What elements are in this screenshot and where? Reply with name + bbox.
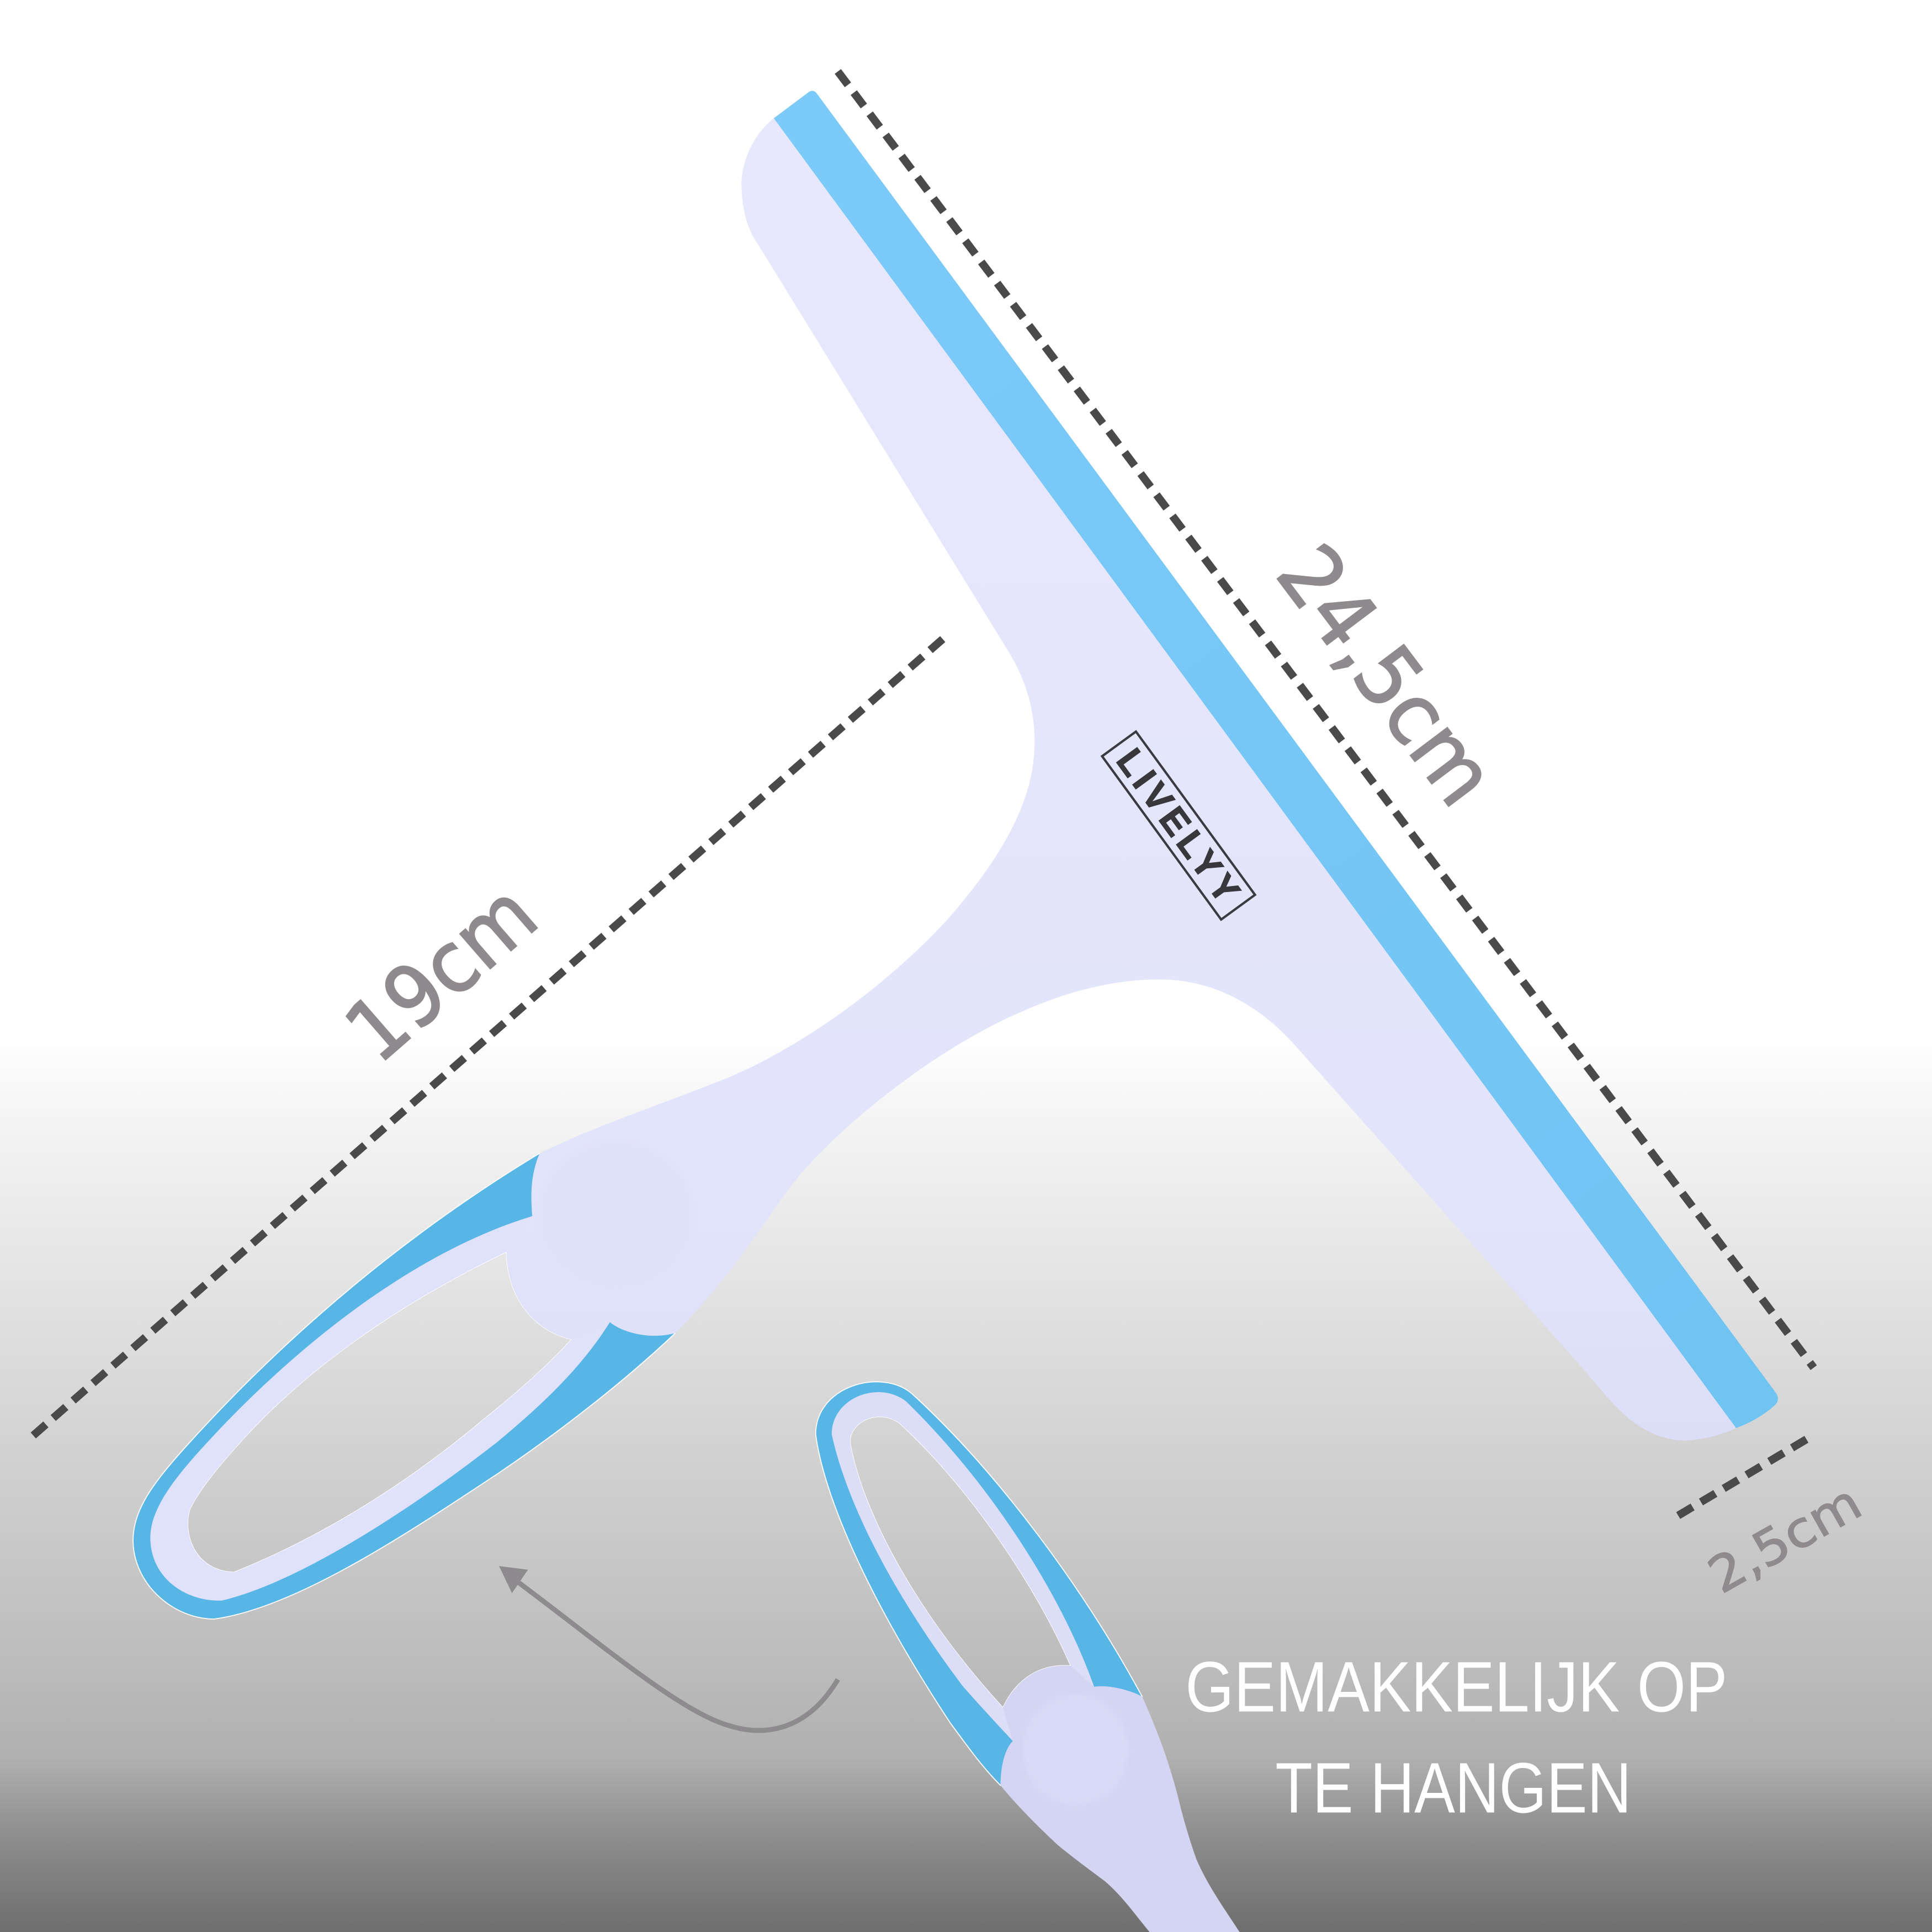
inset dimple: [1023, 1694, 1129, 1805]
inset handle body: [1000, 1665, 1240, 1932]
blue rubber blade: [774, 91, 1778, 1428]
label: 2,5cm: 2,5cm: [1699, 1474, 1871, 1605]
inset: handle hook detail: [816, 1382, 1240, 1932]
dashed line: handle length: [33, 637, 945, 1435]
arrow: curved pointer to handle: [499, 1566, 838, 1731]
squeegee body: [506, 118, 1736, 1441]
dashed line: blade depth: [1678, 1438, 1809, 1516]
logo: LIVELYY: LIVELYY: [1108, 741, 1248, 911]
handle blue rim: [133, 1153, 675, 1619]
handle lavender band: [150, 1216, 610, 1601]
caption: easy to hang: GEMAKKELIJK OP: [1185, 1647, 1727, 1727]
inset lavender band: [832, 1392, 1094, 1741]
inset blue rim: [816, 1382, 1142, 1785]
label: 19cm: 19cm: [327, 865, 555, 1081]
caption: easy to hang: TE HANGEN: [1275, 1748, 1631, 1828]
handle dimple: [540, 1142, 692, 1285]
label: 24,5cm: 24,5cm: [1258, 527, 1515, 823]
squeegee product: [133, 91, 1778, 1619]
dashed line: blade length: [838, 71, 1814, 1368]
caption: easy to hang: [1185, 1647, 1727, 1828]
